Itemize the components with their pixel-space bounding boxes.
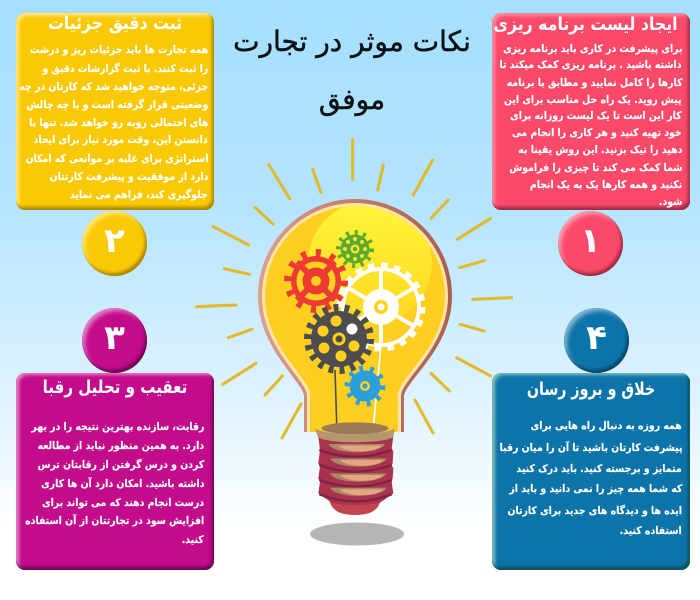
text block: card 2: های احتمالی روبه رو خواهد شد. تنها با: [29, 117, 208, 129]
heading: card 3: تعقیب و تحلیل رقبا: [43, 377, 187, 398]
text block: card 3: کردن و درس گرفتن از رقابتان ترس: [37, 459, 204, 471]
heading: card 2: ثبت دقیق جزئیات: [48, 13, 182, 34]
text block: card 4: پیشرفت کارتان باشید تا آن را میان رقبا: [499, 442, 682, 454]
title: نکات موثر در تجارت: [233, 25, 471, 58]
number badge 3: ۳: [104, 318, 125, 358]
icon: blue gear: [348, 369, 382, 403]
text block: card 1: نکنید و همه کارها یک به یک انجام: [530, 179, 682, 191]
icon: bulb screw base: [315, 422, 395, 515]
text block: card 1: کارها را کامل نمایید و مطابق با برنامه: [506, 77, 682, 89]
title second line: موفق: [319, 83, 385, 116]
text block: card 3: [25, 421, 204, 546]
icon: gear stems: [335, 345, 381, 432]
text block: card 1: داشته باشید . برنامه ریزی کمک میکند تا: [500, 59, 682, 71]
icon: red gear: [289, 254, 343, 308]
text block: card 2: همه تجارت ها باید جزئیات ریز و درشت: [30, 44, 208, 56]
number badge 1: ۱: [580, 221, 601, 261]
text block: card 3: دارد. به همین منظور نباید از مطالعه: [37, 440, 204, 452]
text block: card 3: داشته باشید. امکان دارد آن ها کاری: [41, 478, 204, 490]
text block: card 1: شود.: [659, 196, 682, 208]
text block: card 1: خود تهیه کنید و هر کاری را انجام می: [512, 127, 682, 139]
icon: green gear: [339, 233, 371, 265]
text block: card 2: دانستن این، وقت مورد نیاز برای ایجاد: [34, 134, 208, 146]
text block: card 4: که شما همه چیز را نمی دانید و باید از: [509, 483, 682, 495]
text block: card 4: [499, 420, 682, 537]
number badge 4: ۴: [586, 318, 607, 358]
text block: card 4: استفاده کنید.: [620, 525, 682, 537]
number badge 3: [82, 308, 147, 373]
heading: card 4: خلاق و بروز رسان: [527, 379, 655, 400]
text block: card 1: [500, 43, 682, 208]
text block: card 2: جلوگیری کند، فراهم می نماید: [70, 189, 208, 201]
text block: card 2: وضعیتی قرار گرفته است و با چه چالش: [26, 99, 208, 111]
text block: card 1: کار این است تا یک لیست روزانه برای: [511, 110, 682, 122]
text block: card 3: کنید.: [182, 534, 204, 546]
background rays and light bulb illustration: [195, 138, 514, 546]
text block: card 3: درست انجام دهند که می تواند برای: [42, 497, 204, 509]
panel: card 2 recording details: [16, 13, 214, 210]
base shadow: [310, 522, 404, 546]
text block: card 2: استراتژی برای غلبه بر موانعی که امکان: [25, 153, 208, 165]
text block: card 1: شما کمک می کند تا چیزی را فراموش: [509, 162, 682, 174]
heading: card 1: ایجاد لیست برنامه ریزی: [494, 14, 678, 35]
panel: card 4 creative and up to date: [492, 373, 690, 570]
text block: card 4: همه روزه به دنبال راه هایی برای: [531, 420, 682, 432]
icon: light rays: [197, 139, 512, 438]
panel: card 3 tracking competitors: [16, 373, 214, 570]
text block: card 4: متمایز و برجسته کنید. باید درک کنید: [517, 463, 682, 475]
number badge 1: [558, 211, 623, 276]
number badge 4: [564, 308, 629, 373]
text block: card 2: دارد از موفقیت و پیشرفت کارتتان: [49, 171, 208, 183]
number badge 2: ۲: [104, 221, 125, 261]
text block: card 1: دهید را تیک بزنید. این روش یقینا به: [518, 144, 682, 156]
text block: card 2: جزئی، متوجه خواهید شد که کارتان در چه: [19, 81, 208, 93]
number badge 2: [82, 211, 147, 276]
icon: dark gear: [308, 308, 370, 370]
text block: card 2: [19, 44, 208, 201]
text block: card 4: ایده ها و دیدگاه های جدید برای کارتان: [508, 505, 682, 517]
text block: card 1: برای پیشرفت در کاری باید برنامه ریزی: [503, 43, 682, 55]
text block: card 1: پیش روید. یک راه حل مناسب برای این: [504, 94, 682, 106]
icon: bulb glass: [258, 199, 452, 432]
text block: card 3: افزایش سود در تجارتتان از آن استفاده: [25, 515, 204, 527]
text block: card 2: را ثبت کنند. با ثبت گزارشات دقیق و: [42, 63, 208, 75]
panel: card 1 planning list: [492, 13, 690, 210]
text block: card 3: رقابت، سازنده بهترین نتیجه را در بهر: [31, 421, 204, 433]
icon: white gear: [339, 265, 423, 349]
